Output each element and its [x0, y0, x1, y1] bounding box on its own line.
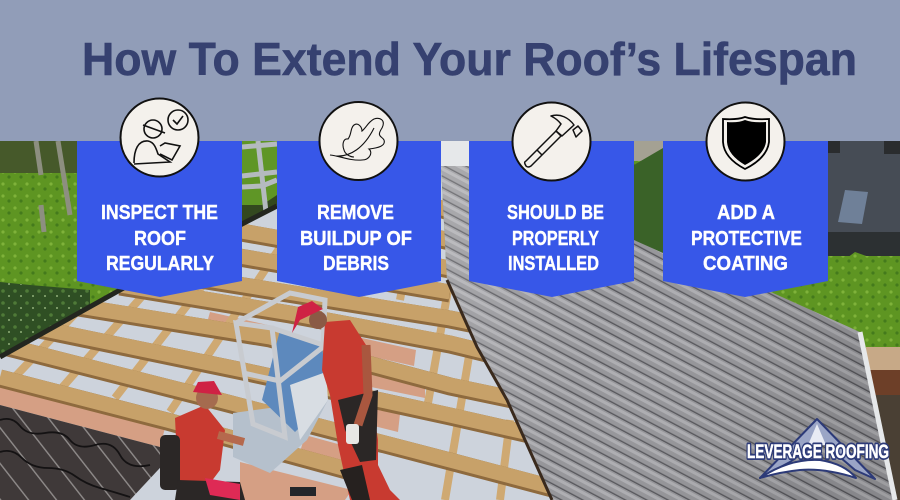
header band	[0, 0, 900, 141]
label: BUILDUP OF	[300, 228, 412, 250]
kneeling roofer	[160, 381, 245, 500]
white fence	[441, 141, 470, 169]
icon: inspector with clipboard	[120, 98, 198, 176]
label	[300, 202, 412, 275]
title: How To Extend Your Roof’s Lifespan	[82, 33, 857, 85]
label: COATING	[703, 253, 788, 275]
tools on the roof	[290, 487, 316, 496]
counter battens	[14, 248, 514, 500]
lawn and trees behind the roof	[0, 141, 900, 500]
label: ADD A	[717, 202, 775, 224]
label	[691, 202, 802, 275]
label: PROTECTIVE	[691, 228, 802, 250]
dark wooden house	[828, 141, 900, 256]
label: REMOVE	[317, 202, 394, 224]
label: SHOULD BE	[507, 202, 604, 224]
grass right of the roof	[773, 252, 900, 350]
timber roof section	[0, 160, 560, 500]
metal roof section	[441, 166, 895, 500]
hedge	[634, 148, 663, 255]
label	[507, 202, 604, 275]
tile section	[0, 405, 172, 500]
scaffold ladder	[242, 141, 277, 228]
panel: should be properly installed	[469, 102, 634, 297]
standing roofer	[292, 301, 400, 500]
panel: inspect the roof	[77, 98, 242, 297]
pallets and yard at right	[866, 347, 900, 500]
label	[101, 202, 218, 275]
label: INSTALLED	[508, 253, 599, 275]
label: ROOF	[134, 228, 186, 250]
icon: leaf	[320, 102, 398, 180]
label: REGULARLY	[106, 253, 215, 275]
icon: hammer	[512, 102, 590, 180]
label: DEBRIS	[323, 253, 389, 275]
window frame and flashing	[233, 293, 328, 473]
horizontal battens	[0, 186, 560, 490]
panel: remove buildup of debris	[277, 102, 441, 297]
roof edge shadow	[0, 206, 277, 357]
driveway behind hedge	[634, 141, 663, 161]
photo background: roofers on a roof	[0, 141, 900, 500]
label: PROPERLY	[512, 228, 600, 250]
logo: Leverage Roofing	[747, 419, 889, 479]
panel: add a protective coating	[663, 102, 828, 297]
label: INSPECT THE	[101, 202, 218, 224]
pink underlay patches	[0, 312, 425, 500]
icon: shield	[706, 102, 784, 180]
